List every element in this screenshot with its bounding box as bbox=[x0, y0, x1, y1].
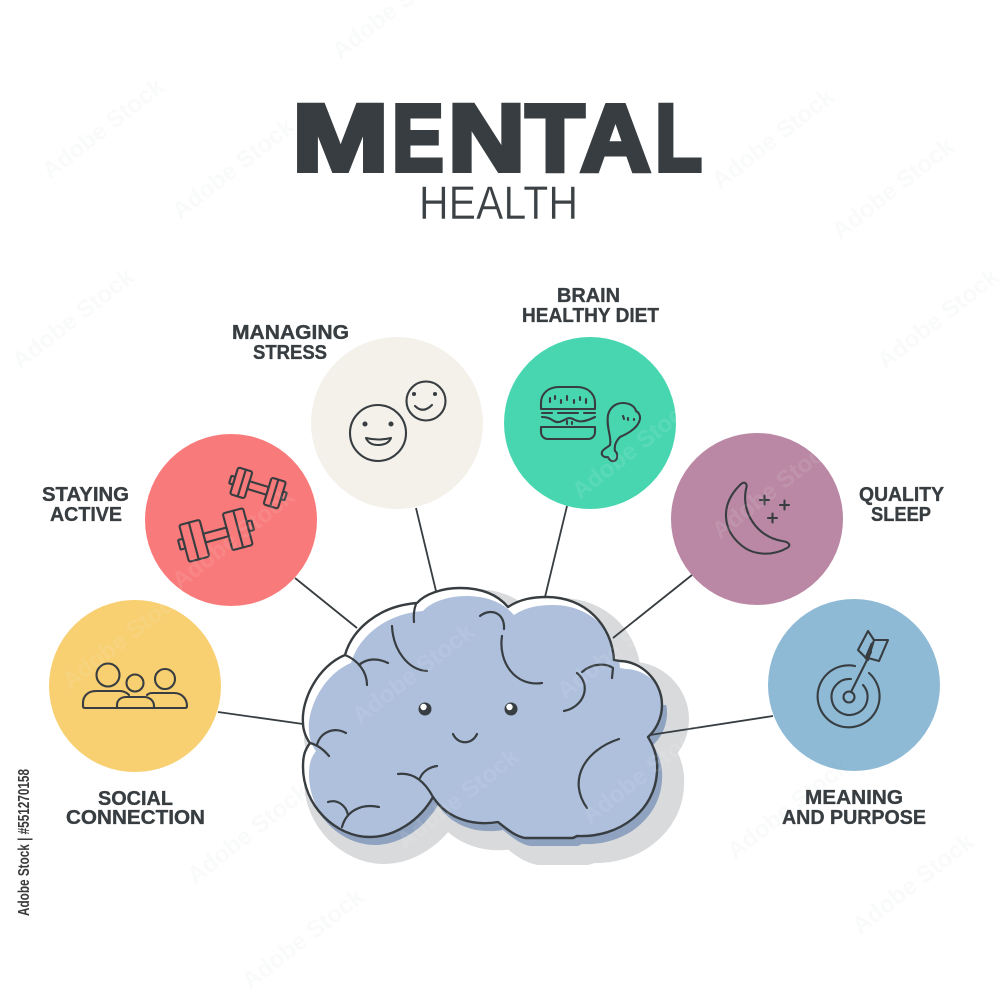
watermark: Adobe Stock bbox=[7, 263, 140, 375]
label: managing stress: STRESS bbox=[253, 342, 327, 364]
icon: target with arrow bbox=[818, 631, 888, 727]
label: staying active bbox=[42, 484, 129, 526]
circle: social connection bbox=[49, 600, 221, 772]
panel: quality sleep bbox=[671, 433, 945, 605]
watermark: Adobe Stock bbox=[392, 743, 525, 855]
title: MENTAL bbox=[292, 86, 702, 192]
title: MENTAL: N bbox=[448, 86, 525, 192]
title: MENTAL: M bbox=[292, 86, 389, 192]
panel: brain healthy diet bbox=[504, 285, 676, 509]
label: brain healthy diet: BRAIN bbox=[557, 285, 620, 307]
brain dark edge bbox=[320, 705, 667, 846]
icon: large dumbbell bbox=[174, 507, 258, 563]
circle: managing stress bbox=[311, 337, 483, 509]
brain white base bbox=[303, 588, 662, 838]
label: brain healthy diet bbox=[522, 285, 659, 327]
watermark: Adobe Stock bbox=[347, 618, 480, 730]
title: MENTAL: A bbox=[580, 86, 650, 192]
icon: burger bbox=[541, 387, 595, 439]
circle: quality sleep bbox=[671, 433, 843, 605]
watermark: Adobe Stock bbox=[57, 583, 190, 695]
icon: people bbox=[83, 664, 187, 708]
label: meaning and purpose bbox=[782, 787, 926, 829]
panel: meaning and purpose bbox=[768, 599, 940, 829]
watermark: Adobe Stock bbox=[707, 83, 840, 195]
title: MENTAL: E bbox=[392, 86, 444, 192]
title: MENTAL: T bbox=[526, 86, 584, 192]
panel: staying active bbox=[42, 434, 317, 606]
label: managing stress: MANAGING bbox=[232, 322, 349, 344]
label: brain healthy diet: HEALTHY DIET bbox=[522, 305, 659, 327]
connector lines bbox=[218, 506, 773, 735]
icon: smiling faces bbox=[350, 382, 446, 461]
icon: crescent moon and stars bbox=[726, 483, 789, 554]
label: managing stress bbox=[232, 322, 349, 364]
brain grey shadow bbox=[317, 602, 676, 852]
circle: staying active bbox=[145, 434, 317, 606]
brain blue fill bbox=[309, 596, 668, 846]
panel: managing stress bbox=[232, 322, 483, 509]
label: staying active: ACTIVE bbox=[50, 504, 122, 526]
watermark: Adobe Stock bbox=[37, 73, 170, 185]
label: social connection bbox=[66, 788, 205, 829]
label: meaning and purpose: AND PURPOSE bbox=[782, 807, 926, 829]
watermark: Adobe Stock bbox=[847, 828, 980, 940]
watermark: Adobe Stock bbox=[707, 433, 840, 545]
label: meaning and purpose: MEANING bbox=[805, 787, 903, 809]
watermark: Adobe Stock bbox=[577, 718, 710, 830]
watermark: Adobe Stock bbox=[182, 778, 315, 890]
label: quality sleep bbox=[859, 484, 945, 526]
brain outline bbox=[303, 588, 662, 838]
stock id text: Adobe Stock | #551270158 bbox=[16, 769, 33, 916]
watermark: Adobe Stock bbox=[827, 133, 960, 245]
subtitle: HEALTH: HEALTH bbox=[419, 176, 578, 229]
watermark: Adobe Stock bbox=[722, 753, 855, 865]
watermark: Adobe Stock bbox=[167, 483, 300, 595]
circle: meaning and purpose bbox=[768, 599, 940, 771]
circle: brain healthy diet bbox=[504, 337, 676, 509]
brain illustration bbox=[303, 588, 676, 852]
watermark: Adobe Stock bbox=[167, 113, 300, 225]
label: social connection: SOCIAL bbox=[98, 788, 173, 810]
brain folds bbox=[310, 604, 619, 827]
label: social connection: CONNECTION bbox=[66, 807, 205, 829]
panel: social connection bbox=[49, 600, 221, 829]
icon: small dumbbell bbox=[226, 466, 290, 510]
icon: chicken drumstick bbox=[602, 403, 640, 461]
label: quality sleep: SLEEP bbox=[871, 504, 931, 526]
label: staying active: STAYING bbox=[42, 484, 129, 506]
label: quality sleep: QUALITY bbox=[859, 484, 945, 506]
watermark: Adobe Stock bbox=[237, 883, 370, 995]
brain eyes bbox=[418, 702, 518, 716]
title: MENTAL: L bbox=[655, 86, 702, 192]
watermark: Adobe Stock bbox=[567, 393, 700, 505]
watermark: Adobe Stock bbox=[552, 593, 685, 705]
